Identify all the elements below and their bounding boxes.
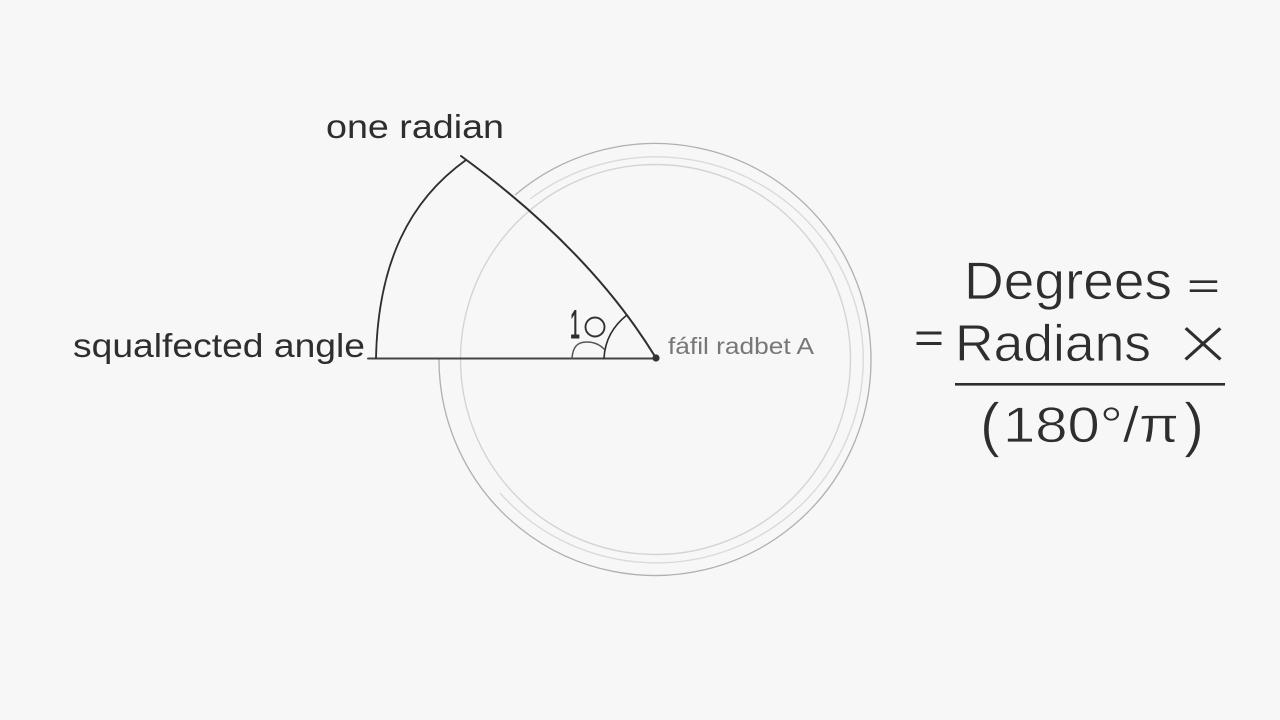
angle label: 1 [570,303,580,347]
wedge radius line [461,156,656,358]
formula: multiply sign: × [1176,296,1230,390]
label: squalfected angle: squalfected angle [73,327,365,364]
angle label [570,303,604,347]
label: one radian: one radian [326,108,504,145]
inner circle [460,164,850,554]
label: radius: fáfil radbet A [668,333,815,359]
formula [914,252,1230,458]
middle circle arc [500,157,863,563]
formula: denominator: ( [980,391,1000,458]
wedge: one radian sector [368,156,656,358]
formula: denominator: ) [1184,391,1204,458]
formula: equals right: = [1187,265,1220,306]
formula: radians: Radians [955,315,1151,373]
formula: equals left: = [914,314,944,361]
formula: denominator: 180°/π [1003,397,1179,453]
formula: degrees: Degrees [964,252,1172,311]
wedge outer arc [376,160,466,358]
formula: fraction bar [955,383,1225,386]
angle arc outer [604,315,627,358]
angle arc inner [572,342,604,358]
outer circle arc [439,143,871,575]
circle: concentric outlines [439,143,871,575]
wedge baseline [368,358,656,360]
center point [652,354,660,362]
angle degree ring [586,318,604,336]
